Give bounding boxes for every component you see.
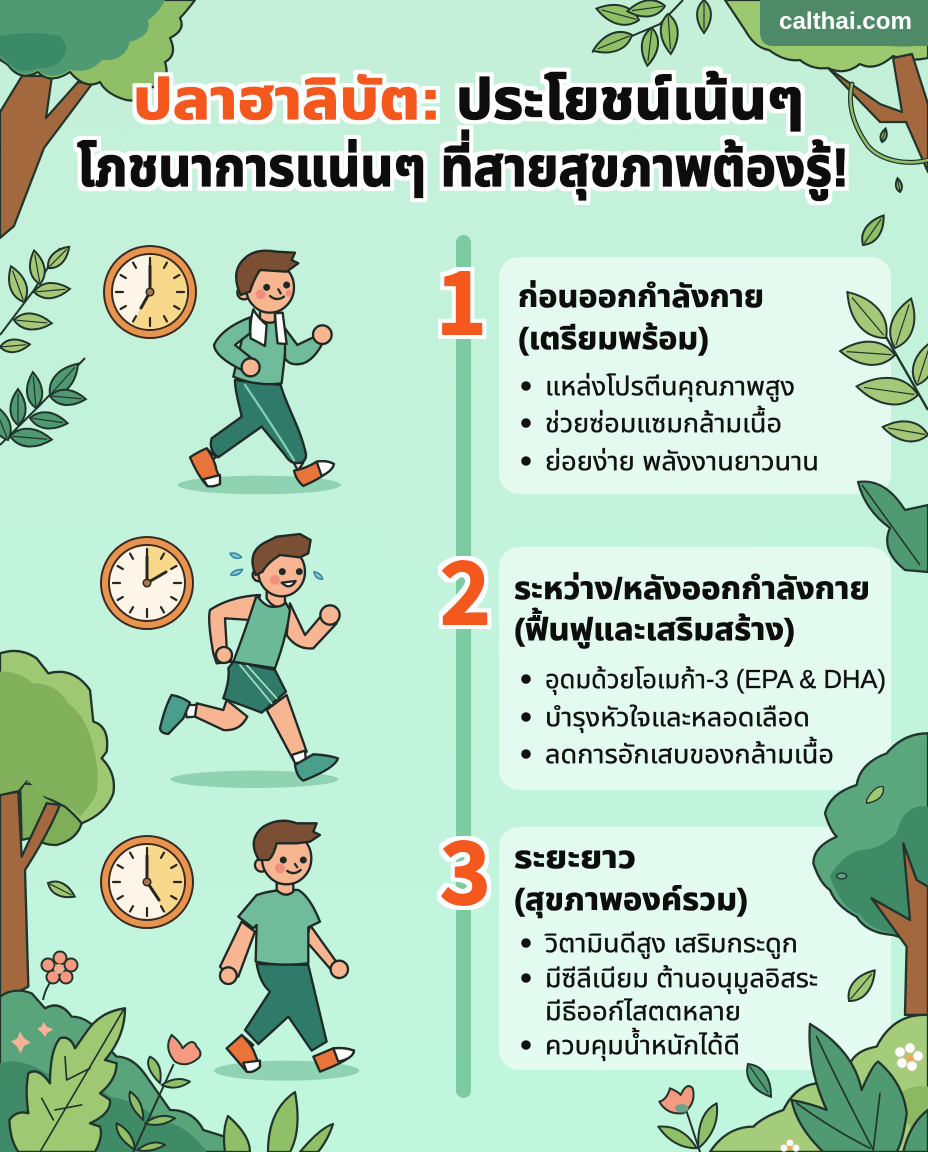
branch: left upper leaves <box>0 242 74 353</box>
card 1: ก่อนออกกำลังกาย <box>518 279 764 314</box>
runner 3: relaxed walker <box>214 821 359 1081</box>
card 1: (เตรียมพร้อม) <box>518 321 709 356</box>
card 1: ช่วยซ่อมแซมกล้ามเนื้อ <box>545 405 782 438</box>
clock 1 <box>104 246 196 338</box>
card 1 <box>499 257 891 494</box>
branch: top centre leaves <box>590 0 711 67</box>
branch: right middle leaves <box>838 284 928 445</box>
tree: lower left <box>0 651 114 1002</box>
card 3: ระยะยาว <box>514 840 636 875</box>
card 2: บำรุงหัวใจและหลอดเลือด <box>545 702 810 733</box>
card 2: (ฟื้นฟูและเสริมสร้าง) <box>514 607 795 648</box>
card 3: วิตามินดีสูง เสริมกระดูก <box>544 928 798 959</box>
card 2: ลดการอักเสบของกล้ามเนื้อ <box>545 736 834 769</box>
card 3: (สุขภาพองค์รวม) <box>514 882 748 918</box>
number 3: 3 <box>440 804 491 929</box>
leaf: large light green bottom left <box>9 1008 125 1152</box>
flower: white flowers <box>780 1043 923 1152</box>
runner 1: warm-up walker with towel <box>178 251 341 494</box>
clock 3 <box>101 836 193 928</box>
bush: bottom left <box>0 991 230 1152</box>
card 2: อุดมด้วยโอเมก้า-3 (EPA & DHA) <box>545 664 886 695</box>
card 3: มีซีลีเนียม ต้านอนุมูลอิสระ <box>545 963 818 994</box>
tree: top left <box>0 0 195 238</box>
card 2: ระหว่าง/หลังออกกำลังกาย <box>514 571 870 606</box>
title: ประโยชน์เน้นๆ <box>456 68 804 131</box>
title <box>77 68 849 200</box>
tree: top right <box>725 0 928 172</box>
leaves: bottom centre left <box>224 1092 333 1152</box>
leaves: large dark green bottom right <box>792 1024 928 1152</box>
leaf: falling left <box>45 877 78 902</box>
runner 2: sweating jogger <box>160 534 340 788</box>
website badge: calthai.com <box>779 8 912 35</box>
flower: tulip bottom right <box>658 1086 717 1152</box>
number 1: 1 <box>436 234 487 359</box>
leaf: falling right <box>843 965 881 1006</box>
tree: lower right <box>813 733 928 1015</box>
card 3 <box>499 827 891 1070</box>
card 2 <box>499 547 891 790</box>
bush: bottom right <box>710 1015 928 1152</box>
small leaves upper right <box>857 128 903 249</box>
card 1: แหล่งโปรตีนคุณภาพสูง <box>545 371 795 402</box>
flower: tulip with leaves <box>117 1035 200 1152</box>
leaf: small dark lower centre <box>741 1059 778 1102</box>
card 3: มีธีออก์ไสตตหลาย <box>545 996 741 1026</box>
branch: right dark leaf <box>858 482 928 572</box>
card 1: ย่อยง่าย พลังงานยาวนาน <box>545 446 819 476</box>
number 2: 2 <box>440 524 491 649</box>
branch: left lower leaves <box>0 358 87 448</box>
title: โภชนาการแน่นๆ ที่สายสุขภาพต้องรู้! <box>77 130 849 200</box>
card 3: ควบคุมน้ำหนักได้ดี <box>545 1027 740 1061</box>
clock 2 <box>101 537 193 629</box>
title: ปลาฮาลิบัต: <box>133 68 441 131</box>
website badge <box>760 0 928 46</box>
flower: pink stalk <box>42 952 78 1000</box>
timeline bar <box>456 235 471 1098</box>
